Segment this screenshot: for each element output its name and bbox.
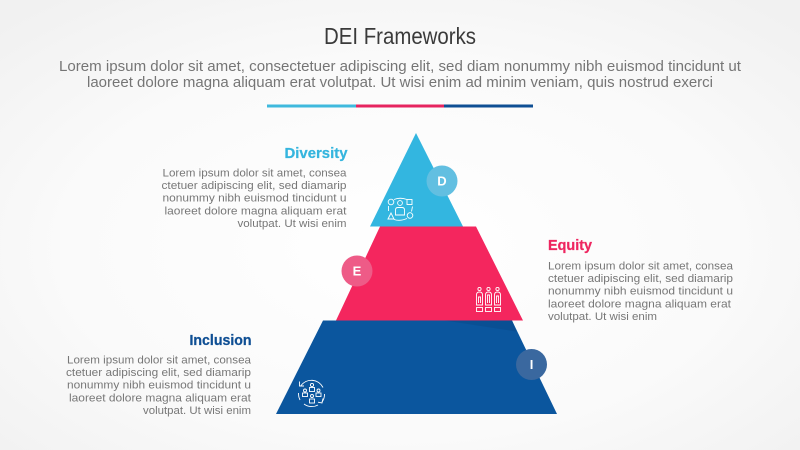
text block: inclusion xyxy=(66,332,252,417)
subtitle text xyxy=(59,59,741,91)
body: diversity: nonummy nibh euismod tincidunt u xyxy=(162,192,346,204)
text block: diversity xyxy=(162,145,348,230)
body: inclusion: volutpat. Ut wisi enim xyxy=(143,405,251,417)
body: diversity: laoreet dolore magna aliquam erat xyxy=(164,206,346,218)
badge: E: E xyxy=(353,264,362,279)
pyramid xyxy=(276,133,557,414)
icon: diversity group xyxy=(388,198,413,220)
badge: E xyxy=(342,256,372,286)
badge: I xyxy=(516,349,547,380)
icon: inclusion cycle xyxy=(298,380,325,407)
heading: equity: Equity xyxy=(548,237,593,254)
body: equity: volutpat. Ut wisi enim xyxy=(548,311,657,323)
title: DEI Frameworks xyxy=(324,23,476,49)
body: diversity: volutpat. Ut wisi enim xyxy=(238,218,346,230)
body: equity: Lorem ipsum dolor sit amet, consea xyxy=(548,260,733,272)
body: inclusion: ctetuer adipiscing elit, sed diamarip xyxy=(66,367,251,379)
text block: equity xyxy=(548,237,733,323)
body: inclusion: nonummy nibh euismod tincidunt u xyxy=(67,380,251,392)
body: diversity xyxy=(162,168,346,230)
pyramid tier: inclusion xyxy=(276,320,557,414)
body: diversity: Lorem ipsum dolor sit amet, consea xyxy=(162,168,346,180)
badge: I: I xyxy=(530,357,533,372)
body: equity xyxy=(548,260,733,323)
subtitle text: laoreet dolore magna aliquam erat volutpat. Ut wisi enim ad minim veniam, quis nostrud exerci xyxy=(87,75,713,91)
body: diversity: ctetuer adipiscing elit, sed diamarip xyxy=(162,180,346,192)
body: inclusion: Lorem ipsum dolor sit amet, consea xyxy=(67,354,251,366)
body: equity: nonummy nibh euismod tincidunt u xyxy=(548,286,733,298)
body: equity: laoreet dolore magna aliquam erat xyxy=(548,298,731,310)
body: equity: ctetuer adipiscing elit, sed diamarip xyxy=(548,273,733,285)
heading: diversity: Diversity xyxy=(284,145,348,162)
body: inclusion: laoreet dolore magna aliquam erat xyxy=(69,392,251,404)
pyramid tier: equity xyxy=(336,226,523,320)
heading: inclusion: Inclusion xyxy=(190,332,252,349)
tri-colour divider xyxy=(267,104,533,108)
body: inclusion xyxy=(66,354,251,417)
subtitle text: Lorem ipsum dolor sit amet, consectetuer adipiscing elit, sed diam nonummy nibh euismod tincidunt ut xyxy=(59,59,741,75)
icon: equity people xyxy=(476,287,500,312)
badge: D: D xyxy=(437,174,447,189)
pyramid tier: diversity xyxy=(370,133,463,226)
